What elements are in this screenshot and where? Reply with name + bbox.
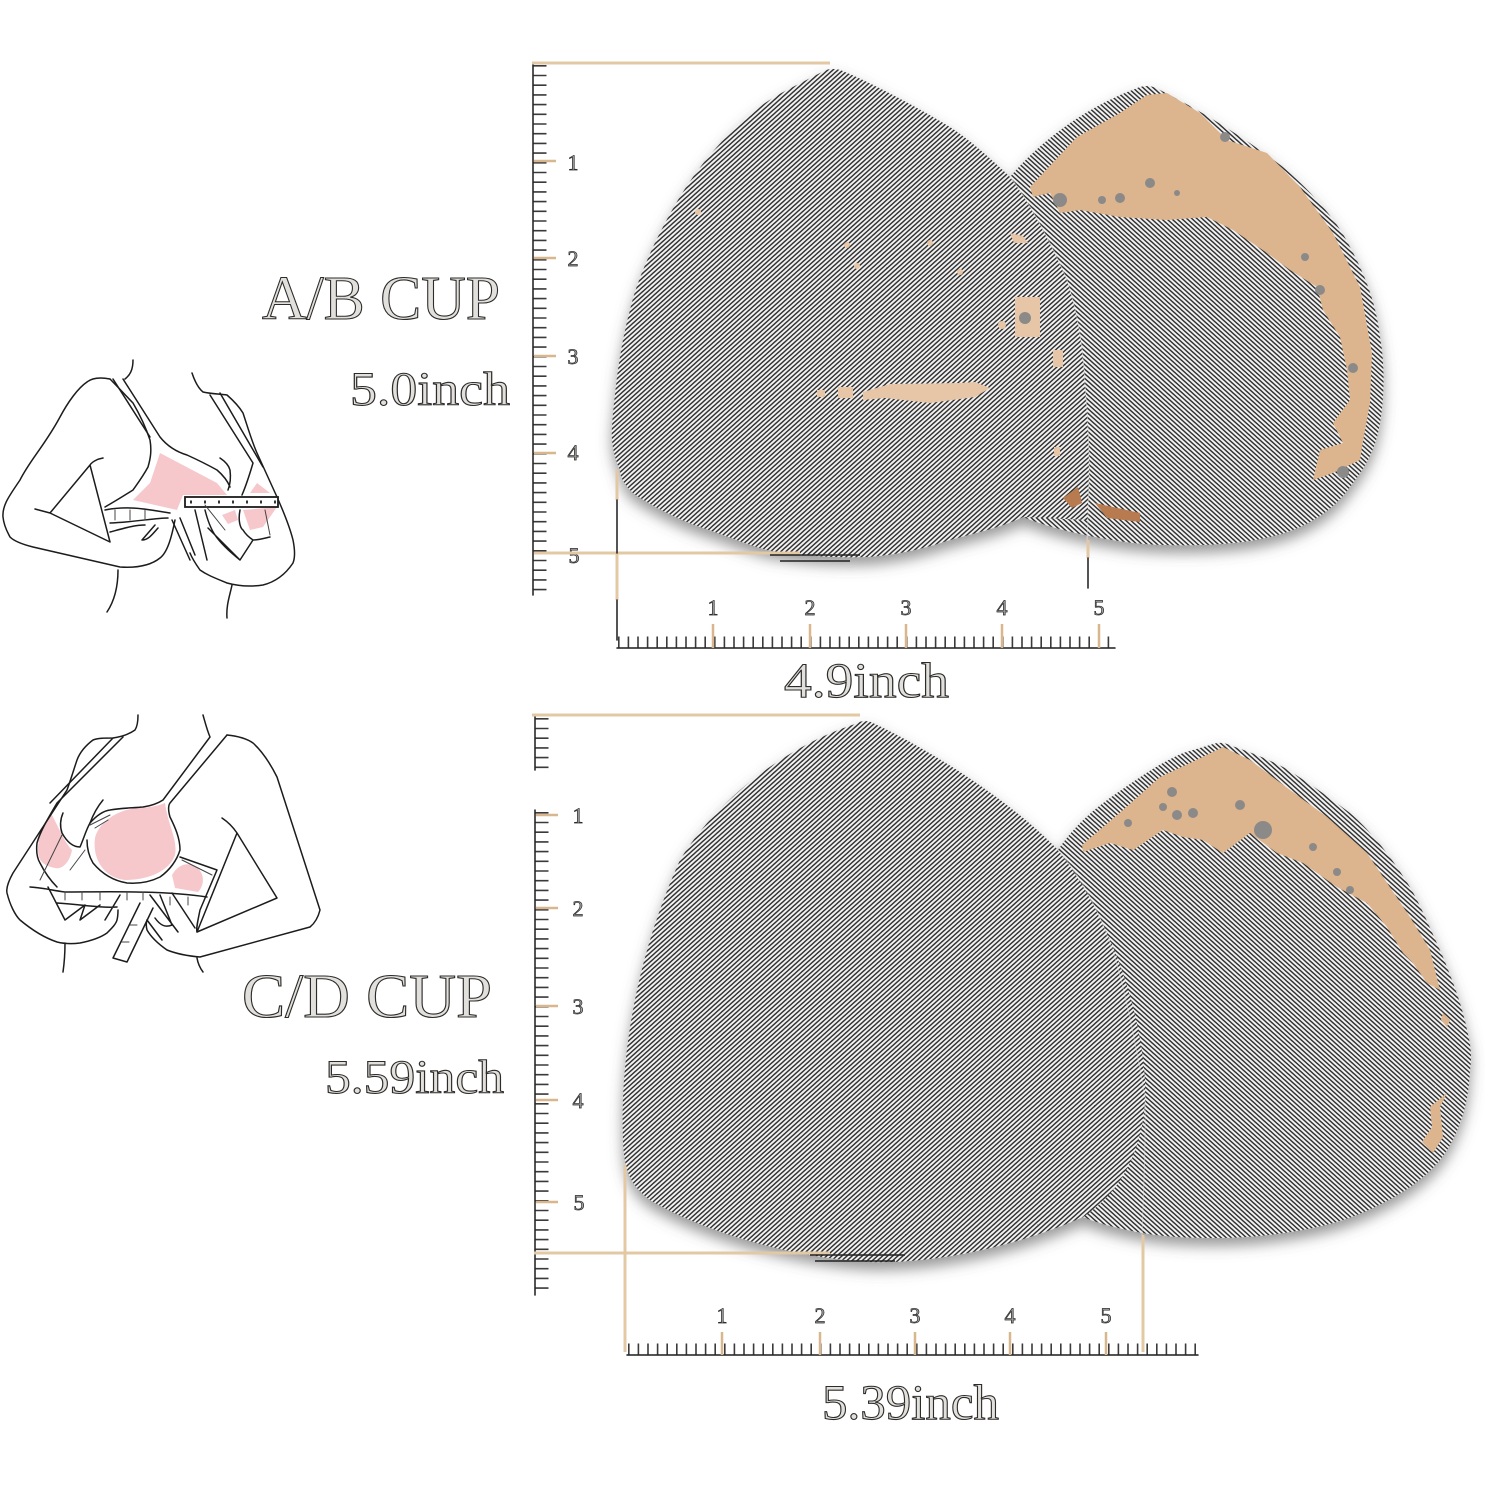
horizontal ruler, C/D cup	[627, 1303, 1198, 1355]
skin-tone patches	[817, 233, 1063, 456]
icon: A/B cup measuring illustration	[3, 360, 294, 618]
label: cup width 4.9 inch: 4.9inch	[784, 652, 949, 708]
measuring tape	[30, 887, 207, 920]
pink bra fill	[133, 453, 277, 530]
left pad, A/B cup	[612, 69, 1089, 557]
inch numbers	[716, 1303, 1112, 1328]
inch numbers	[708, 595, 1104, 620]
inch numbers: 5	[568, 543, 580, 568]
inch numbers: 2	[804, 595, 816, 620]
inch numbers: 3	[910, 1303, 920, 1328]
inch numbers: 2	[814, 1303, 826, 1328]
right pad, A/B cup	[1010, 86, 1384, 545]
inch numbers: 1	[568, 150, 578, 175]
inch numbers: 4	[1004, 1303, 1016, 1328]
label: cup height 5.0 inch: 5.0inch	[350, 363, 510, 416]
horizontal ruler, A/B cup	[617, 595, 1115, 648]
label: cup width 5.39 inch: 5.39inch	[822, 1374, 999, 1430]
inch numbers	[572, 803, 584, 1215]
label: cup height 5.59 inch: 5.59inch	[325, 1051, 504, 1104]
seam line	[1010, 177, 1089, 540]
heading: A/B cup: A/B CUP	[262, 265, 500, 333]
inch numbers: 3	[568, 344, 578, 369]
inch numbers: 5	[574, 1190, 584, 1215]
measure guides, A/B cup	[532, 63, 1088, 640]
right pad, C/D cup	[1058, 743, 1471, 1238]
vertical ruler, A/B cup	[533, 63, 580, 595]
brown patches	[1063, 487, 1140, 522]
inch numbers: 4	[568, 440, 578, 465]
icon: C/D cup measuring illustration	[7, 715, 320, 972]
panel: A/B cup pads	[612, 69, 1384, 557]
exposed skin-tone area	[1030, 93, 1372, 480]
inch numbers: 2	[568, 246, 578, 271]
inch numbers: 2	[572, 896, 584, 921]
inch numbers	[568, 150, 580, 568]
seam line	[1058, 850, 1145, 1235]
measure guides, C/D cup	[532, 715, 1143, 1352]
inch numbers: 1	[716, 1303, 728, 1328]
inch numbers: 4	[572, 1088, 584, 1113]
panel: C/D cup pads	[623, 721, 1471, 1262]
left pad, C/D cup	[623, 721, 1145, 1262]
inch numbers: 5	[1094, 595, 1104, 620]
inch numbers: 3	[572, 994, 584, 1019]
exposed skin-tone area	[1082, 747, 1450, 1153]
vertical ruler, C/D cup	[535, 716, 584, 1295]
inch numbers: 1	[572, 803, 584, 828]
inch numbers: 4	[996, 595, 1008, 620]
heading: C/D cup: C/D CUP	[242, 963, 492, 1031]
measuring tape	[185, 497, 278, 507]
pink bra fill	[38, 803, 203, 892]
inch numbers: 5	[1100, 1303, 1112, 1328]
inch numbers: 1	[708, 595, 718, 620]
inch numbers: 3	[900, 595, 912, 620]
